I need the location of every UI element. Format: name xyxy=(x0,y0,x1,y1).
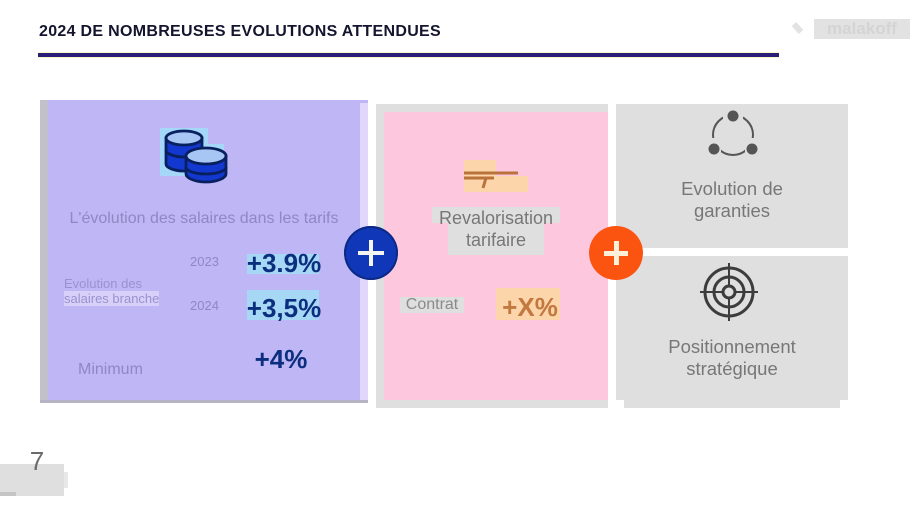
text: guarantees: garanties xyxy=(694,200,770,221)
text: pink heading: tarifaire xyxy=(466,230,526,250)
icon: target xyxy=(700,263,758,321)
value: +3.9%: +3.9% xyxy=(247,248,321,278)
right edge strip xyxy=(360,103,368,400)
icon: orange plus xyxy=(589,226,643,280)
icon: coins xyxy=(160,128,228,184)
panel lower lip xyxy=(624,400,840,408)
panel: salaries xyxy=(40,100,368,403)
text: pink heading: Revalorisation xyxy=(439,208,553,228)
value row: 2023 xyxy=(190,248,321,278)
side label: branch: Evolution des xyxy=(64,276,142,291)
highlight xyxy=(247,254,319,274)
title underline xyxy=(38,53,779,57)
text: positioning xyxy=(668,336,796,379)
value row: 2024 xyxy=(190,290,321,323)
logo: malakoff xyxy=(827,19,897,38)
value row: minimum xyxy=(78,344,307,378)
panel: guarantees xyxy=(616,104,848,248)
panel: pink xyxy=(376,104,608,408)
side label: branch xyxy=(64,276,159,306)
panel: positioning xyxy=(616,256,848,408)
text: guarantees xyxy=(681,178,783,221)
side label: branch: salaires branche xyxy=(64,291,159,306)
label: 2024: 2024 xyxy=(190,298,219,313)
title: 2024 DE NOMBREUSES EVOLUTIONS ATTENDUES xyxy=(39,23,441,40)
text: positioning: stratégique xyxy=(686,358,778,379)
text: guarantees: Evolution de xyxy=(681,178,783,199)
text: pink heading xyxy=(432,207,560,255)
highlight xyxy=(247,290,319,320)
pink fill xyxy=(384,112,608,400)
label: contrat: Contrat xyxy=(406,296,458,313)
left edge strip xyxy=(40,100,48,400)
page number tab xyxy=(0,464,68,496)
label: minimum: Minimum xyxy=(78,361,143,378)
icon: cycle xyxy=(708,110,758,156)
value: +3,5%: +3,5% xyxy=(247,293,321,323)
label: 2023: 2023 xyxy=(190,254,219,269)
icon: orange tool xyxy=(464,160,528,192)
icon: blue plus xyxy=(344,226,398,280)
page number: 7 xyxy=(30,446,44,476)
value: +4%: +4% xyxy=(255,344,307,374)
logo xyxy=(792,19,910,39)
panel background xyxy=(616,256,848,400)
text: positioning: Positionnement xyxy=(668,336,796,357)
heading: salaries: L'évolution des salaires dans les tarifs xyxy=(70,210,338,227)
